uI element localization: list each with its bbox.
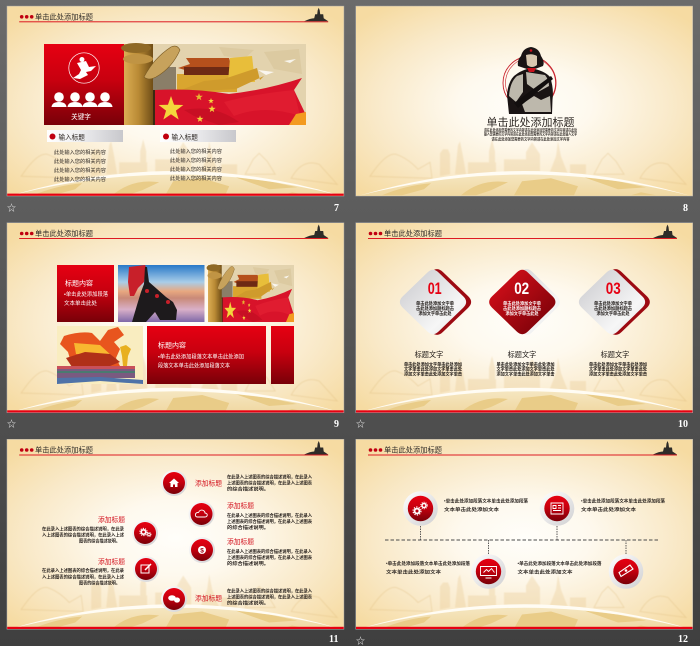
left subheading bar: 输入标题 <box>58 132 85 142</box>
content box top left: 标题内容 <box>65 278 93 288</box>
right subheading bar <box>160 130 236 142</box>
content box bottom middle: 标题内容 <box>158 340 186 350</box>
footer star icon 7: ☆ <box>7 203 16 213</box>
text top left <box>444 498 529 513</box>
column 3 caption <box>589 350 647 378</box>
text bottom right <box>518 560 602 576</box>
dollar node: $ <box>200 548 204 554</box>
node monitor <box>471 554 506 589</box>
note node <box>133 556 159 582</box>
text bottom left: 文本单击此处添加文本 <box>386 568 442 576</box>
slide 10 title: 单击此处添加标题 <box>384 229 443 238</box>
label top <box>195 474 313 492</box>
slide 8 description: 请在此处添加您需要的文字内容请在此处添加您需要的文字内容请在此处 <box>484 128 577 132</box>
diamond 03 <box>579 269 650 335</box>
label left upper: 添加标题 <box>98 515 125 524</box>
slide 7 title: 单击此处添加标题 <box>35 12 94 22</box>
right bullet text <box>170 147 222 182</box>
left bullet text: 此处输入您的相关内容 <box>54 166 106 174</box>
label second right: 在此录入上述图表的综合描述说明，在此录入 <box>227 512 313 519</box>
label third right: 上述图表的综合描述说明，在此录入上述图表 <box>227 554 313 561</box>
right bullet text: 此处输入您的相关内容 <box>170 147 222 155</box>
text bottom right: •单击此处添加段落文本单击此处添加段落 <box>518 560 602 567</box>
node gears <box>403 491 438 526</box>
column 1 caption <box>404 350 462 378</box>
node document <box>540 491 574 526</box>
red keyword panel <box>44 44 124 125</box>
label bottom: 添加标题 <box>195 594 222 602</box>
label left upper <box>42 515 125 544</box>
label top: 添加标题 <box>195 478 222 488</box>
label top: 上述图表的综合描述说明，在此录入上述图表 <box>227 480 313 486</box>
small red bar <box>271 326 294 384</box>
slide 10 panel <box>356 222 693 413</box>
footer star icon 9: ☆ <box>7 419 16 429</box>
text top right <box>581 498 666 513</box>
page number 12: 12 <box>678 634 688 645</box>
slide 11 panel <box>7 439 344 630</box>
node ticket <box>609 554 643 589</box>
diamond 01: 01 <box>428 279 442 298</box>
page number 7: 7 <box>334 203 339 214</box>
footer star icon 10: ☆ <box>356 419 365 429</box>
page number 9: 9 <box>334 419 339 430</box>
slide 11 title: 单击此处添加标题 <box>35 446 94 455</box>
diamond 02: 击此处添加副标题击 <box>503 305 541 312</box>
text top right: •单击此处添加段落文本单击此处添加段落 <box>581 498 666 504</box>
content box bottom middle: 段落文本单击此处添加段落文本 <box>158 362 230 370</box>
slide 9 title: 单击此处添加标题 <box>35 229 94 238</box>
column 2 caption: 标题文字 <box>508 350 536 359</box>
home node <box>161 470 187 496</box>
diamond 03: 单击此处添加文字单 <box>594 300 632 307</box>
slide 12 title: 单击此处添加标题 <box>384 446 443 455</box>
label left lower: 添加标题 <box>98 557 125 566</box>
column 1 caption: 标题文字 <box>415 350 443 359</box>
label top: 的综合描述说明。 <box>227 486 269 492</box>
diamond 02: 02 <box>514 279 529 298</box>
diamond 01 <box>400 269 471 335</box>
label bottom: 的综合描述说明。 <box>227 600 269 606</box>
page number 10: 10 <box>678 419 688 430</box>
text top left: •单击此处添加段落文本单击此处添加段落 <box>444 498 529 504</box>
label second right: 的综合描述说明。 <box>227 524 269 531</box>
text bottom left: •单击此处添加段落文本单击此处添加段落 <box>386 560 471 567</box>
label bottom: 上述图表的综合描述说明，在此录入上述图表 <box>227 594 313 600</box>
slide 8 description: 请在此处添加您需要的文字内容请在此处添加文字内容 <box>492 136 570 142</box>
right bullet text: 此处输入您的相关内容 <box>170 156 222 164</box>
slide 12 panel <box>356 439 693 630</box>
slide 8 title: 单击此处添加标题 <box>486 115 575 129</box>
content box top left <box>57 265 114 322</box>
text top left: 文本单击此处添加文本 <box>444 506 500 513</box>
diamond 02: 单击此处添加文字单 <box>503 300 541 307</box>
label third right <box>227 537 313 567</box>
slide 9 panel <box>7 222 344 413</box>
content box bottom middle: •单击此处添加段落文本单击此处添加 <box>158 352 244 360</box>
column 3 caption: 单击此处添加文字单击此处添加 <box>589 361 647 368</box>
label left lower: 图表的综合描述说明。 <box>79 580 120 586</box>
gears node <box>132 520 158 546</box>
left subheading bar <box>47 130 123 142</box>
soldier emblem <box>503 47 556 114</box>
diamond 01: 击此处添加副标题击 <box>416 305 454 312</box>
label left lower: 在此录入上述图表的综合描述说明，在此录 <box>42 567 125 574</box>
diamond 03: 03 <box>606 279 621 298</box>
content box bottom middle <box>147 326 266 384</box>
label bottom <box>195 588 313 606</box>
page number 8: 8 <box>683 203 688 214</box>
diamond 02: 添加文字单击此处 <box>506 310 539 317</box>
label third right: 添加标题 <box>227 537 254 546</box>
label third right: 在此录入上述图表的综合描述说明，在此录入 <box>227 548 313 555</box>
label left upper: 图表的综合描述说明。 <box>79 538 120 544</box>
flag raising photo <box>118 265 204 322</box>
diamond 02 <box>489 269 560 335</box>
label left lower: 入上述图表的综合描述说明，在此录入上述 <box>42 574 125 580</box>
slide 8 panel <box>356 6 693 196</box>
label third right: 的综合描述说明。 <box>227 560 269 567</box>
column 3 caption: 添加文字单击此处添加文字单击 <box>589 370 647 378</box>
Tiananmen and flag photo <box>121 43 306 125</box>
red keyword panel: 关键字 <box>71 112 91 121</box>
column 3 caption: 标题文字 <box>601 350 629 359</box>
page number 11: 11 <box>329 634 338 645</box>
left bullet text: 此处输入您的相关内容 <box>54 157 106 165</box>
label left upper: 在此录入上述图表的综合描述说明，在此录 <box>42 526 125 532</box>
right subheading bar: 输入标题 <box>172 132 198 142</box>
footer star icon 12: ☆ <box>356 636 365 646</box>
column 1 caption: 添加文字单击此处添加文字单击 <box>404 370 462 378</box>
column 2 caption: 单击此处添加文字单击此处添加 <box>496 361 555 368</box>
diamond 03: 添加文字单击此处 <box>596 310 630 317</box>
cloud node <box>188 501 214 527</box>
column 2 caption: 文字单击此处添加文字单击此处 <box>496 366 555 372</box>
label second right: 添加标题 <box>227 501 254 510</box>
left bullet text: 此处输入您的相关内容 <box>54 148 106 156</box>
label left upper: 入上述图表的综合描述说明，在此录入上述 <box>42 532 125 538</box>
label top: 在此录入上述图表的综合描述说明，在此录入 <box>227 474 313 480</box>
diamond 01: 单击此处添加文字单 <box>416 300 454 307</box>
diamond 03: 击此处添加副标题击 <box>594 305 632 312</box>
content box top left: •单击此处添加段落 <box>64 290 108 298</box>
column 1 caption: 单击此处添加文字单击此处添加 <box>404 361 462 368</box>
slide 8 description <box>484 128 577 142</box>
slide 7 panel <box>7 6 344 196</box>
diamond 01: 添加文字单击此处 <box>418 310 452 317</box>
text bottom left <box>386 560 471 576</box>
column 3 caption: 文字单击此处添加文字单击此处 <box>589 366 647 372</box>
label left lower <box>42 557 125 586</box>
chat node <box>161 586 187 612</box>
column 2 caption <box>496 350 555 378</box>
column 2 caption: 添加文字单击此处添加文字单击 <box>496 370 555 378</box>
text bottom right: 文本单击此处添加文本 <box>518 568 573 576</box>
column 1 caption: 文字单击此处添加文字单击此处 <box>404 366 462 372</box>
left bullet text <box>54 148 106 183</box>
label second right <box>227 501 313 531</box>
slide 8 description: 输入您需要的文字内容请在此处添加您需要的文字内容请在此处输入文字 <box>484 132 577 136</box>
right bullet text: 此处输入您的相关内容 <box>170 174 222 182</box>
content box top left: 文本单击此处 <box>64 299 98 307</box>
left bullet text: 此处输入您的相关内容 <box>54 175 106 183</box>
dollar node <box>189 537 215 563</box>
Tiananmen photo <box>207 264 294 322</box>
timeline dashed line <box>385 526 659 556</box>
label bottom: 在此录入上述图表的综合描述说明，在此录入 <box>227 588 313 594</box>
China map photo <box>57 326 143 384</box>
label second right: 上述图表的综合描述说明，在此录入上述图表 <box>227 518 313 525</box>
right bullet text: 此处输入您的相关内容 <box>170 165 222 173</box>
text top right: 文本单击此处添加文本 <box>581 506 637 513</box>
